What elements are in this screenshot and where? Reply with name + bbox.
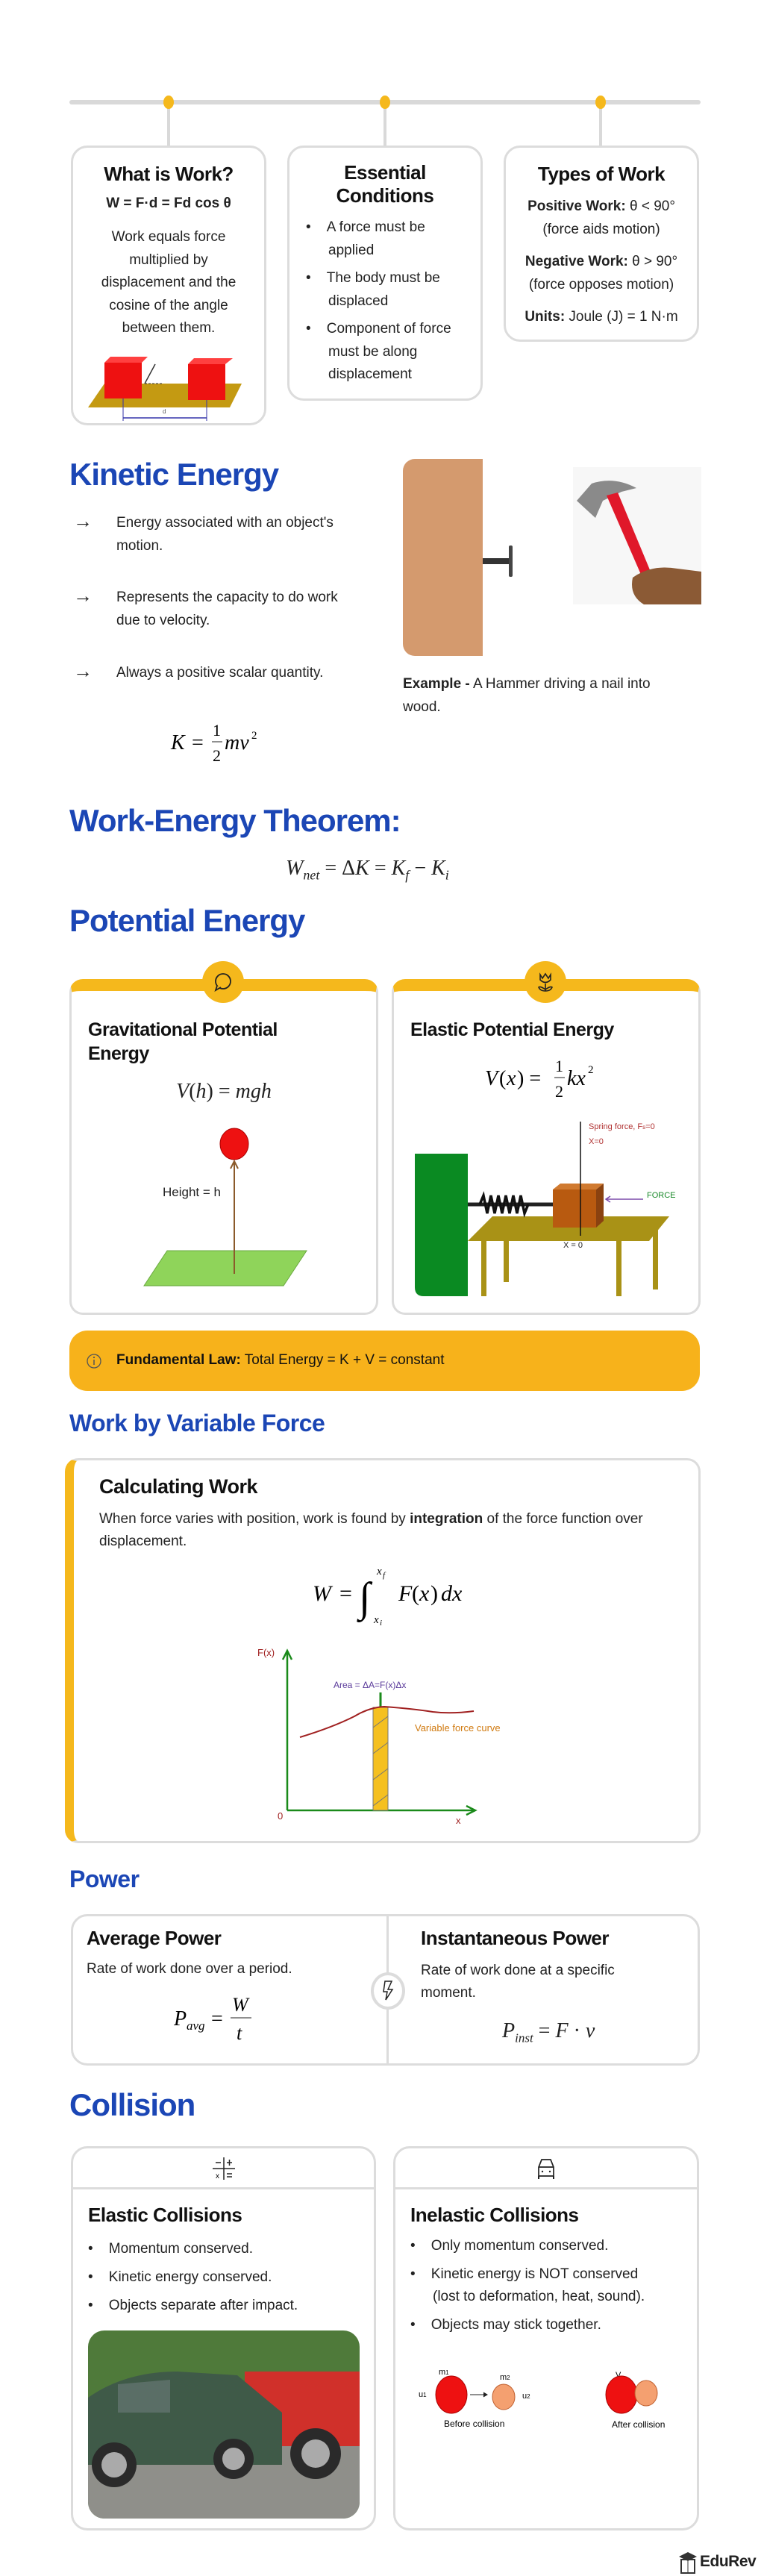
chart: variable force graph: Variable force curve — [415, 1722, 501, 1734]
illustration: hammer in hand — [577, 481, 701, 604]
heading: power: Power — [69, 1866, 140, 1892]
formula: V(h)=mgh: V(h) = mgh — [176, 1080, 272, 1103]
list: elastic: • Objects separate after impact. — [88, 2298, 298, 2313]
formula: kinetic energy: 2 — [213, 746, 221, 765]
caption: example: Example - A Hammer driving a nail into wood. — [403, 676, 651, 715]
chart: variable force graph: 0 — [278, 1810, 283, 1822]
panel: inelastic collisions — [393, 2146, 699, 2530]
list: conditions: • The body must be displaced — [306, 270, 440, 309]
list: inelastic — [410, 2238, 645, 2333]
diagram: collision before and after — [419, 2368, 665, 2430]
formula: kinetic energy: mv — [225, 731, 249, 754]
panel: calculating work — [65, 1458, 701, 1843]
illustration: ball and height — [143, 1128, 307, 1287]
icon: speech bubble — [202, 961, 244, 1003]
icon: info — [87, 1354, 101, 1369]
formula: work: W = F·d = Fd cos θ — [106, 196, 231, 211]
text: fundamental law: Fundamental Law: Total Energy = K + V = constant — [116, 1352, 444, 1368]
text: → — [73, 510, 93, 532]
heading: types of work: Types of Work — [538, 163, 665, 185]
formula: average power — [174, 1994, 251, 2044]
formula: integral: x — [373, 1614, 379, 1626]
illustration: spring block table: Spring force, Fs=0 — [589, 1122, 655, 1131]
formula: V(x)=1/2kx2 — [485, 1057, 594, 1101]
list: inelastic: • Kinetic energy is NOT conserved (lost to deformation, heat, sound). — [410, 2266, 645, 2304]
list: inelastic: • Objects may stick together. — [410, 2317, 601, 2333]
diagram: collision before and after: m1 — [439, 2368, 449, 2377]
panel: essential conditions — [287, 146, 483, 401]
chart: variable force graph: F(x) — [257, 1647, 275, 1658]
formula: kinetic energy: K — [170, 731, 186, 754]
formula: kinetic energy: = — [192, 731, 204, 754]
icon: car — [395, 2148, 697, 2189]
list: conditions: • Component of force must be along displacement — [306, 321, 451, 382]
panel: types of work — [504, 146, 699, 342]
heading: calculating work: Calculating Work — [99, 1475, 257, 1498]
formula: kinetic energy: 2 — [251, 730, 257, 742]
formula: V(x)=1/2kx2: kx — [567, 1067, 586, 1090]
text: instantaneous power: Rate of work done at a specific moment. — [421, 1963, 615, 2001]
list: elastic: • Kinetic energy conserved. — [88, 2269, 272, 2285]
list: elastic: • Momentum conserved. — [88, 2241, 253, 2257]
formula: instantaneous power: Pinst = F · v — [502, 2019, 595, 2045]
formula: average power: W — [232, 1994, 250, 2016]
formula: integral: f — [383, 1571, 386, 1580]
formula: V(x)=1/2kx2: 2 — [588, 1064, 594, 1076]
heading: essential conditions: Conditions — [336, 184, 433, 207]
image: car crash — [88, 2330, 360, 2519]
formula: integral: F — [398, 1581, 413, 1606]
illustration: spring block table: FORCE — [647, 1191, 676, 1200]
formula: kinetic energy — [170, 721, 257, 765]
diagram: collision before and after: u1 — [419, 2390, 427, 2399]
chart: variable force graph: Area = ΔA=F(x)Δx — [334, 1680, 406, 1690]
illustration: ball and height: Height = h — [163, 1185, 221, 1199]
list: kinetic energy points — [73, 510, 338, 682]
diagram: collision before and after: After collision — [612, 2419, 665, 2430]
formula: V(x)=1/2kx2: 2 — [555, 1082, 563, 1101]
text: types — [525, 198, 678, 325]
diagram: collision before and after: m2 — [500, 2373, 510, 2382]
list: elastic — [88, 2241, 298, 2313]
text: Energy associated with an object's motion. — [116, 515, 334, 554]
list: conditions: • A force must be applied — [306, 219, 425, 258]
illustration: blocks: d — [163, 408, 166, 415]
heading: kinetic energy: Kinetic Energy — [69, 457, 278, 492]
formula: average power: avg — [187, 2019, 205, 2033]
heading: essential conditions: Essential — [344, 161, 426, 184]
icon: calculator: x — [215, 2172, 219, 2180]
panel: gravitational potential energy — [69, 961, 378, 1315]
formula: V(x)=1/2kx2: x — [506, 1067, 516, 1090]
formula: average power: t — [237, 2022, 242, 2044]
illustration: spring block table: X=0 — [589, 1137, 604, 1146]
icon: lightning — [371, 1972, 405, 2010]
list: inelastic: • Only momentum conserved. — [410, 2238, 608, 2254]
formula: integral: x — [419, 1581, 430, 1606]
formula: integral: ) — [430, 1581, 438, 1606]
heading: elastic collisions: Elastic Collisions — [88, 2204, 242, 2226]
illustration: spring block table: X = 0 — [563, 1241, 583, 1250]
logo: edurev — [679, 2552, 757, 2574]
formula: V(x)=1/2kx2: ( — [499, 1067, 506, 1090]
formula: average power: = — [211, 2007, 223, 2031]
logo: edurev: EduRev — [700, 2553, 756, 2570]
diagram: collision before and after: V — [616, 2371, 621, 2380]
formula: integral: x — [376, 1566, 382, 1578]
text: work definition: Work equals force multiplied by displacement and the cosine of the angle between them. — [101, 229, 236, 336]
formula: kinetic energy: 1 — [213, 721, 221, 740]
formula: work-energy theorem: Wnet = ΔK = Kf − Ki — [286, 857, 449, 883]
panel: elastic collisions — [71, 2146, 376, 2530]
heading: work-energy theorem: Work-Energy Theorem: — [69, 803, 401, 838]
heading: collision: Collision — [69, 2087, 195, 2122]
illustration: spring block table — [415, 1122, 676, 1296]
illustration: blocks — [88, 357, 242, 421]
illustration: wood and nail — [403, 459, 513, 656]
formula: integral — [313, 1566, 463, 1627]
formula: V(x)=1/2kx2: 1 — [555, 1057, 563, 1075]
formula: integral: = — [339, 1581, 352, 1606]
formula: integral: ∫ — [357, 1575, 373, 1623]
text: average power: Rate of work done over a period. — [87, 1961, 292, 1977]
text: types: (force opposes motion) Units: Joule (J) = 1 N·m — [525, 277, 678, 325]
icon: flower — [525, 961, 566, 1003]
panel: elastic potential energy — [392, 961, 701, 1315]
heading: gravitational: Gravitational Potential Energy — [88, 1019, 278, 1064]
panel: power — [71, 1914, 700, 2066]
text: → — [73, 584, 93, 607]
text: types: Positive Work: θ < 90° — [527, 198, 675, 214]
formula: V(x)=1/2kx2: V — [485, 1067, 500, 1090]
formula: integral: dx — [441, 1581, 463, 1606]
chart: variable force graph: x — [456, 1815, 461, 1826]
formula: integral: ( — [412, 1581, 419, 1606]
heading: work by variable force: Work by Variable Force — [69, 1410, 325, 1437]
timeline — [69, 96, 701, 146]
diagram: collision before and after: u2 — [522, 2392, 530, 2401]
heading: instantaneous power: Instantaneous Power — [421, 1927, 609, 1949]
heading: essential conditions — [336, 161, 433, 207]
heading: potential energy: Potential Energy — [69, 903, 304, 938]
heading: average power: Average Power — [87, 1927, 221, 1949]
icon: calculator — [73, 2148, 374, 2189]
list: conditions — [306, 219, 451, 382]
formula: V(x)=1/2kx2: ) = — [517, 1067, 541, 1090]
panel: what is work — [71, 146, 266, 425]
text: integration: When force varies with position, work is found by integration of the force function over displacement. — [99, 1511, 643, 1549]
text: Represents the capacity to do work due to velocity. — [116, 590, 338, 628]
diagram: collision before and after: Before collision — [444, 2419, 504, 2429]
text: Always a positive scalar quantity. — [116, 665, 323, 681]
chart: variable force graph — [257, 1647, 501, 1826]
formula: average power: P — [174, 2007, 187, 2031]
heading: elastic: Elastic Potential Energy — [410, 1019, 614, 1040]
text: types: (force aids motion) Negative Work: θ > 90° — [525, 222, 677, 269]
formula: integral: W — [313, 1581, 334, 1606]
heading: inelastic collisions: Inelastic Collisions — [410, 2204, 579, 2226]
text: → — [73, 660, 93, 682]
heading: what is work: What is Work? — [104, 163, 234, 185]
callout: fundamental law — [69, 1331, 700, 1391]
